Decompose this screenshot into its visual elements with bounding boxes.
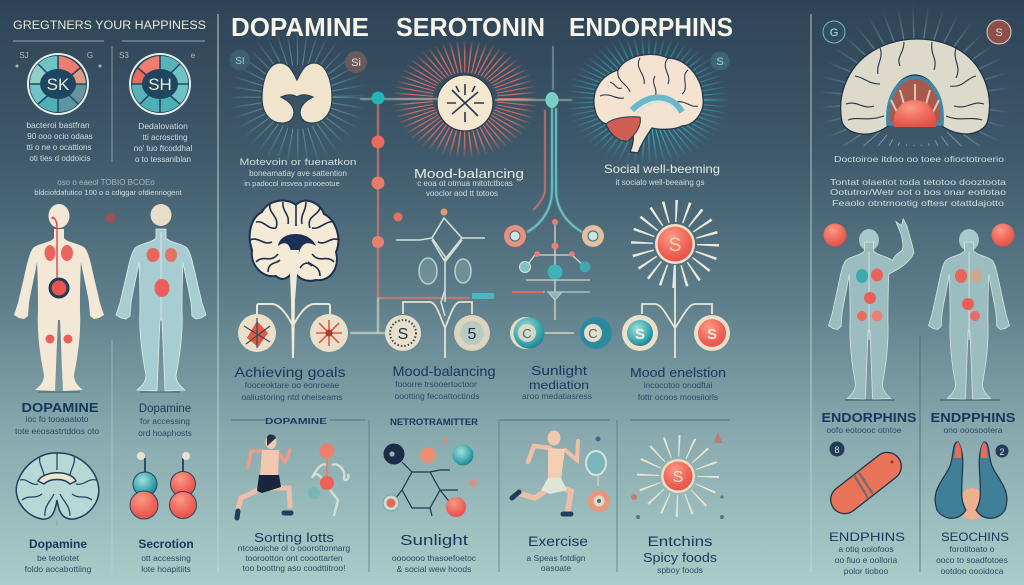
badge left [230, 50, 250, 70]
label: sunlight: ooooooo thasoefoetoc [392, 553, 477, 563]
branch and circles: mood balancing [385, 302, 490, 358]
label: dopamine lower: be teotiotet [37, 553, 80, 563]
label: endorphins lower left [829, 530, 905, 576]
circle S teal [622, 315, 658, 351]
label: setting goals [238, 530, 351, 573]
label: endorphins left: oofo eotoooc otntoe [826, 425, 902, 435]
icon: sun core: S [673, 469, 683, 486]
left sub heading: oso o eaeol TOBIO BCOEo [57, 178, 155, 187]
circle S red [694, 315, 730, 351]
left sub heading [34, 178, 183, 197]
label: endorphins right: ENDPPHINS [930, 410, 1016, 425]
label: endorphins lower left: polor tioboo [844, 566, 888, 576]
label: endorphins spicy foods [643, 534, 717, 575]
text: mood balancing [414, 166, 524, 198]
text: social well-being: Social well-beeming [604, 162, 720, 176]
brain folds [250, 202, 340, 276]
circle S red: S [707, 326, 717, 343]
label: endorphins lower right [936, 530, 1009, 576]
icon: hormone rings [586, 436, 610, 512]
icon: molecule [383, 439, 477, 517]
badge right: Si [351, 57, 361, 69]
small marker [106, 213, 116, 223]
text: mood balancing: Mood-balancing [414, 166, 524, 181]
text block: Feaolo otntmootig oftesr otattdajotto [832, 198, 1004, 208]
label: endorphins spicy foods: spboy foods [657, 565, 703, 575]
label: dopamine [15, 401, 99, 436]
body figure: standing [928, 224, 1014, 399]
title: DOPAMINE [231, 12, 369, 42]
badge left [823, 21, 845, 43]
body figure: raised arm [824, 219, 914, 399]
body figure: secondary [116, 204, 206, 391]
label: dopamine right: ord hoaphosts [138, 428, 192, 438]
left text block A: oti ties d oddoicis [29, 154, 91, 163]
rays [413, 57, 517, 141]
label: dopamine right: for accessing [140, 416, 190, 426]
badge left: SI [235, 56, 245, 67]
branch [289, 250, 299, 358]
label: endorphins right: ono ooosootera [943, 425, 1003, 435]
icon: sun rays [648, 446, 708, 506]
label: mood balancing lower: Mood-balancing [392, 363, 496, 379]
sunlight pathway network [504, 219, 612, 349]
label: endorphins left: ENDORPHINS [822, 410, 917, 425]
label: endorphins spicy foods: Spicy foods [643, 551, 717, 565]
label: dopamine lower [25, 537, 92, 574]
title: SEROTONIN [396, 12, 545, 42]
label: sunlight mediation: aroo medatiasress [522, 391, 592, 401]
label: mood regulation [630, 365, 726, 402]
label: mood regulation: Mood enelstion [630, 365, 726, 380]
icon: lungs: 2 [999, 447, 1005, 457]
donut icon: left SK: SK [47, 75, 70, 94]
text: motivation: boneamatiay ave sattention [249, 169, 347, 178]
label: sunlight: Sunlight [400, 533, 468, 549]
panel: bottom dopamine [237, 416, 351, 573]
small icons [631, 432, 724, 519]
sun and branch: mood regulation [622, 211, 730, 358]
branch [642, 265, 712, 358]
left text block A: tti o ne o ocattions [27, 143, 91, 152]
label: endorphins lower right: SEOCHINS [941, 530, 1009, 544]
panel: bottom exercise [512, 430, 610, 573]
label: dopamine lower: Dopamine [29, 537, 87, 551]
icon: brain cross section [16, 453, 99, 526]
left text block B: no' tuo ftcoddhal [134, 144, 192, 153]
circle goal right [310, 314, 348, 352]
left text block B: Dedalovation [138, 121, 188, 131]
circle C left: C [522, 326, 532, 341]
circle S teal: S [635, 326, 645, 343]
panel dividers [13, 14, 218, 572]
label: setting goals: Sorting lotts [254, 530, 335, 545]
label: endorphins lower right: ootdoo oooidoca [941, 566, 1004, 576]
badge right: S [995, 27, 1003, 39]
panel: bottom neurotransmitter [383, 417, 478, 574]
small corner badges [16, 51, 196, 68]
label: achieving goals: Achieving goals [234, 364, 346, 380]
label: mood balancing lower [392, 363, 496, 401]
text block: Tontat olaetiot toda tetotoo dooztoota [830, 177, 1006, 187]
foot shadows [38, 391, 180, 393]
left text block A: bacteroi bastfran [26, 120, 90, 130]
panel: left column [13, 14, 218, 574]
left text block A [26, 120, 93, 163]
icon: sun core [661, 459, 695, 493]
title: ENDORPHINS [569, 12, 733, 42]
label: sunlight mediation [522, 363, 592, 401]
text block [830, 154, 1006, 208]
text: motivation: Motevoin or fuenatkon [240, 157, 356, 168]
label: sunlight mediation: Sunlight [531, 363, 587, 378]
text: motivation [240, 157, 356, 188]
donut icon: left SK [27, 53, 89, 115]
label: dopamine: DOPAMINE [22, 401, 99, 415]
label: mood regulation: incocotoo onodftai [644, 380, 713, 390]
text: mood balancing: vooclor aod tt totoos [426, 189, 498, 198]
icon: lungs [935, 442, 1008, 520]
small corner badges: e [191, 51, 196, 60]
text: mood balancing: c eoa ot otmua mitotctbcas [417, 179, 513, 188]
text: motivation: in padocol insvea pirooeotue [244, 179, 340, 188]
panel: bottom endorphins [631, 432, 724, 575]
icon: runner [512, 430, 578, 514]
pathway nodes [372, 92, 558, 248]
badge: S [716, 56, 724, 68]
label: mood balancing lower: oootting fecoattoctinds [394, 391, 480, 401]
label: achieving goals: fooceoktare oo eonroeae [245, 380, 340, 390]
label: secretion: Secrotion [138, 537, 194, 551]
label: exercise: Exercise [528, 533, 588, 549]
header: NETROTRAMITTER [390, 417, 478, 428]
label: secretion: lote hoapitiits [141, 564, 191, 574]
header: DOPAMINE [265, 416, 327, 426]
pathway connector lines [350, 46, 582, 333]
circle 5: 5 [468, 326, 477, 343]
brain core [278, 234, 316, 258]
label: dopamine lower: foldo aocabottiing [25, 564, 92, 574]
label: sunlight mediation: mediation [529, 378, 589, 392]
label: exercise [526, 533, 588, 573]
rays [248, 47, 348, 147]
small corner badges: G [87, 51, 93, 60]
icon: kidney shaped gland [262, 63, 332, 123]
label: secretion [138, 537, 194, 574]
rays [845, 30, 985, 170]
text block: Doctoiroe itdoo oo toee ofioctotroerio [834, 154, 1004, 164]
panel: dopamine top [230, 47, 367, 188]
label: achieving goals: oaliustoring ntd oheiseams [241, 392, 343, 402]
circle S: S [398, 326, 408, 343]
badge right [345, 51, 367, 73]
label: endorphins lower left: a otiq ooiofoos [838, 544, 894, 554]
label: sunlight: & social wew hoods [397, 564, 471, 574]
icon: pill: 8 [834, 445, 840, 455]
left text block B: tti acroscting [143, 133, 187, 142]
panel dividers [811, 14, 920, 572]
body figure: dopamine [14, 204, 104, 391]
icon: brain side [594, 54, 703, 153]
brain and branch: achieving goals [238, 201, 348, 358]
small corner badges: S3 [119, 51, 129, 60]
label: endorphins left [822, 410, 917, 435]
icon: paired bulbs [130, 452, 196, 519]
circle goal left [238, 314, 276, 352]
sun disc [655, 224, 695, 264]
label: sunlight [392, 533, 477, 574]
label: endorphins spicy foods: Entchins [648, 534, 713, 549]
diamond diagram [394, 208, 494, 316]
left heading: GREGTNERS YOUR HAPPINESS [13, 20, 206, 32]
badge left: G [830, 27, 838, 39]
text: social well-being: it socialo well-beeaing gs [616, 178, 704, 187]
bottom section dividers [231, 420, 730, 572]
icon: stick figure with hormone nodes [308, 444, 348, 516]
title [231, 12, 733, 42]
label: mood regulation: fottr ocoos moosiiorls [638, 392, 718, 402]
badge right [987, 20, 1011, 44]
icon: sun disc [437, 75, 493, 131]
icon: brain [250, 201, 338, 281]
rays [591, 54, 705, 146]
panel: endorphins top [591, 52, 730, 187]
label: dopamine right: Dopamine [139, 403, 191, 415]
label: endorphins lower right: ooco to soadfotoes [936, 555, 1008, 565]
left text block A: 90 ooo ocio odaas [27, 132, 93, 141]
label: endorphins lower right: forotitoato o [950, 544, 995, 554]
circle C right: C [588, 326, 598, 341]
icon: arch brain [841, 39, 990, 134]
panel: serotonin top [413, 57, 524, 198]
label: secretion: ott accessing [141, 553, 191, 563]
label: endorphins lower left: ENDPHINS [829, 530, 905, 544]
sun disc: S [669, 235, 681, 256]
panel: right column [811, 14, 1016, 576]
icon: runner [237, 434, 291, 518]
icon: pill [825, 442, 907, 519]
label: mood balancing lower: fooorre trsooertoctoor [395, 379, 477, 389]
left text block B [134, 121, 192, 164]
label: setting goals: ntcoaoiche ol o ooorottonnarg [238, 543, 351, 553]
left sub heading: bldciofdafutico 100 o o cdiggar ofdiennogent [34, 188, 183, 197]
text block: Ootutror/Wetr oot o bos onar eotlotao [830, 187, 1006, 197]
small corner badges: SJ [19, 51, 29, 60]
foot shadows [845, 399, 1000, 401]
label: dopamine right [138, 403, 192, 438]
sun rays [642, 211, 708, 277]
donut icon: right SH: SH [148, 75, 172, 94]
label: dopamine: ioc fo tooaaatoto [26, 414, 89, 424]
label: setting goals: toorootton ont cooottarten [245, 553, 343, 563]
label: setting goals: too boottng aso coodttitroo! [242, 563, 346, 573]
branch arms [257, 304, 330, 326]
donut icon: right SH [129, 53, 191, 115]
label: dopamine: tote eeosastrtddos oto [15, 426, 99, 436]
label: achieving goals [234, 364, 346, 402]
left text block B: o to tessaniblan [135, 155, 191, 164]
label: endorphins right [930, 410, 1016, 435]
text: social well-being [604, 162, 720, 187]
label: exercise: a Speas fotdign [526, 553, 586, 563]
label: endorphins lower left: oo fiuo e oolloria [835, 555, 897, 565]
label: exercise: oasoate [541, 563, 571, 573]
